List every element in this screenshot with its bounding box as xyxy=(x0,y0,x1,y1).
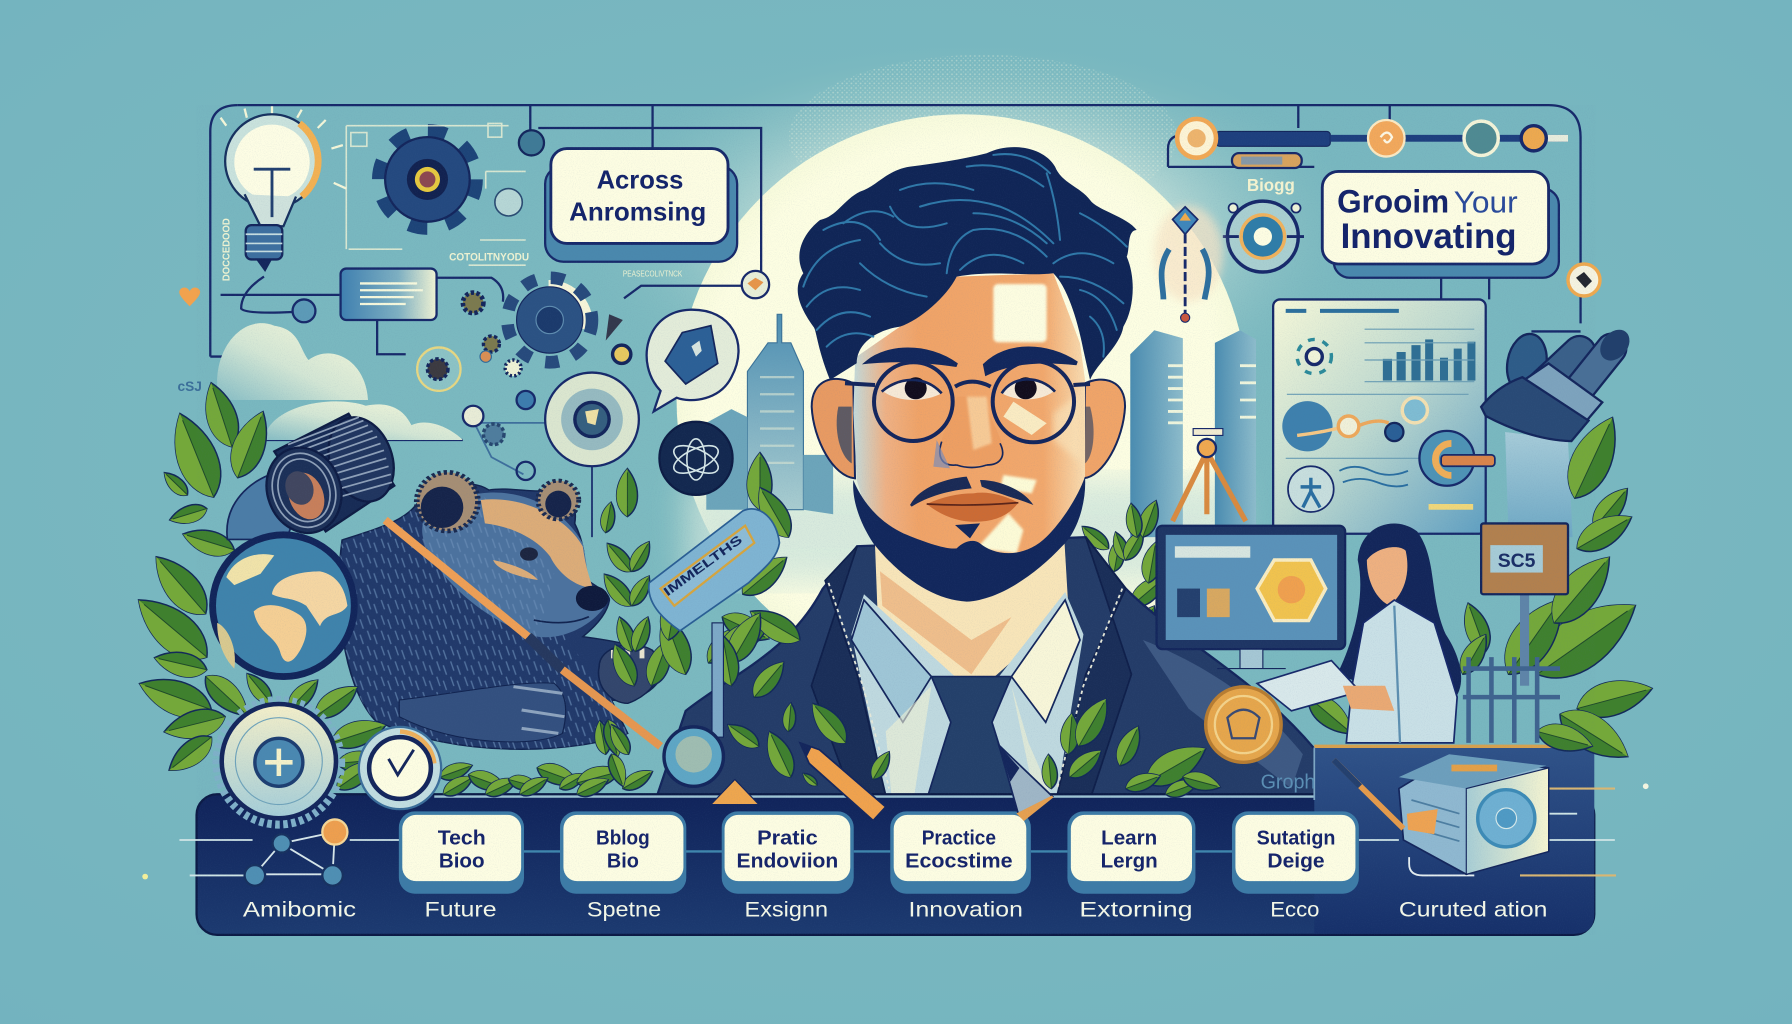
panel top rule xyxy=(434,796,1314,798)
dial xyxy=(1419,431,1495,486)
orange pencil xyxy=(800,743,886,821)
icon: node top xyxy=(519,130,544,155)
bear ears xyxy=(417,472,478,531)
bar chart xyxy=(1383,339,1475,381)
tripod xyxy=(1173,429,1246,521)
icon: spool xyxy=(255,408,405,544)
callout: Groom Your Innovating: Grooim xyxy=(1337,184,1449,220)
eyes xyxy=(882,377,1055,400)
sun glow behind portrait xyxy=(577,46,1366,686)
icon: light bulb xyxy=(221,106,346,272)
center plants xyxy=(597,453,806,703)
callout: Across Anromsing xyxy=(545,149,737,262)
buildings right xyxy=(1130,330,1256,549)
frame and circuit lines xyxy=(210,105,1581,440)
hair strands xyxy=(803,154,1127,357)
bear fur xyxy=(339,500,628,749)
face xyxy=(853,273,1085,600)
small heading Biogg: Biogg xyxy=(1247,175,1295,195)
bear eye and nose xyxy=(520,547,538,561)
left side doodles xyxy=(178,287,202,394)
step box: Sutatign Deige xyxy=(1232,811,1359,894)
icon: telescope xyxy=(1481,324,1636,537)
callout: Across Anromsing: Across xyxy=(597,165,683,195)
bear body xyxy=(339,484,664,749)
hood xyxy=(1481,377,1589,441)
glass orb xyxy=(664,727,723,786)
collar xyxy=(1520,363,1602,425)
bottom panel xyxy=(197,746,1594,935)
small text Groph: Groph xyxy=(1261,771,1315,794)
bottom labels: Curuted ation xyxy=(1399,897,1547,922)
portrait: body xyxy=(657,514,1326,795)
monitor xyxy=(1157,526,1345,669)
left plant cluster xyxy=(126,378,389,796)
step box: Learn Lergn xyxy=(1067,811,1195,894)
ears xyxy=(812,379,1125,478)
connector lines xyxy=(179,789,1616,875)
callout: Groom Your Innovating: Innovating xyxy=(1341,216,1517,256)
icon: heart xyxy=(179,287,200,306)
bottom labels: Future xyxy=(425,897,497,922)
africa xyxy=(254,605,306,662)
portrait: head xyxy=(798,147,1137,602)
gauge xyxy=(217,701,341,824)
glasses xyxy=(845,361,1090,442)
neck xyxy=(874,514,1069,697)
buildings left xyxy=(706,314,833,514)
clouds xyxy=(217,323,463,440)
triangle marker xyxy=(711,779,759,805)
gold badge xyxy=(1206,687,1281,762)
face highlights xyxy=(977,284,1082,553)
schematic lines near gear xyxy=(346,123,526,265)
cube xyxy=(1399,754,1549,874)
woman xyxy=(1257,524,1461,743)
step box: Tech Bioo xyxy=(399,811,524,894)
clock xyxy=(359,727,441,809)
rear blob xyxy=(1503,331,1551,396)
bottom labels: Extorning xyxy=(1079,897,1193,922)
barrels xyxy=(1543,352,1579,386)
step box: Learn Lergn: Learn xyxy=(1101,827,1157,850)
face xyxy=(1367,547,1407,606)
note box xyxy=(341,269,437,320)
ornament xyxy=(1154,206,1223,322)
step box: Practice Ecocstime xyxy=(890,811,1031,894)
decorative dots xyxy=(1643,783,1649,789)
icon: large gear xyxy=(379,131,475,227)
step box: Tech Bioo: Bioo xyxy=(439,849,485,872)
callout: Groom Your Innovating xyxy=(1322,171,1559,278)
step box: Practice Ecocstime: Practice xyxy=(922,827,996,850)
eurasia xyxy=(272,571,347,626)
runner xyxy=(1288,466,1334,512)
network icon xyxy=(245,819,347,886)
pie xyxy=(1282,398,1427,451)
lower-center sprig xyxy=(605,693,1223,801)
faint caption: PEASECOLIVTNCK xyxy=(623,270,683,279)
step box: Tech Bioo: Tech xyxy=(438,827,486,850)
bear head fur xyxy=(422,493,554,637)
small label csh: cSJ xyxy=(178,379,202,394)
bottom labels xyxy=(243,897,1547,922)
vertical caption: DOCCEDOOD xyxy=(222,218,233,281)
bottom labels: Innovation xyxy=(909,897,1023,922)
telescope base xyxy=(1505,432,1573,537)
step box: Bblog Bio: Bio xyxy=(607,849,639,872)
beard xyxy=(853,477,1085,602)
bear foreleg xyxy=(399,683,566,742)
shirt xyxy=(851,592,1083,795)
jacket xyxy=(657,537,1326,795)
bottom labels: Ecco xyxy=(1270,897,1319,922)
step box: Sutatign Deige: Deige xyxy=(1267,849,1325,872)
necktie xyxy=(928,677,1015,795)
node icon xyxy=(742,271,769,298)
step box: Learn Lergn: Lergn xyxy=(1101,849,1158,872)
mouth xyxy=(910,477,1033,522)
bear claws xyxy=(513,687,564,733)
left marker dot xyxy=(142,874,148,879)
pen and tag xyxy=(1334,760,1438,834)
bottom labels: Exsignn xyxy=(745,897,828,922)
garland of leaves xyxy=(437,718,656,801)
callout: Across Anromsing: Anromsing xyxy=(569,197,706,227)
hair xyxy=(798,147,1137,380)
center sign xyxy=(649,509,779,737)
bear xyxy=(339,472,664,749)
step box: Bblog Bio: Bblog xyxy=(596,827,650,850)
blue leaf behind spool xyxy=(227,473,293,539)
right-of-face plants xyxy=(1068,498,1201,688)
icon: globe xyxy=(209,531,358,680)
step box: Sutatign Deige: Sutatign xyxy=(1257,827,1335,850)
step box: Pratic Endoviion: Pratic xyxy=(757,827,818,850)
fence xyxy=(1463,657,1560,743)
right raised section xyxy=(1314,746,1594,934)
clipboard xyxy=(1257,661,1360,711)
bear pencil xyxy=(385,520,661,746)
bottom labels: Amibomic xyxy=(243,897,356,922)
step box: Practice Ecocstime: Ecocstime xyxy=(905,849,1013,872)
step box: Pratic Endoviion xyxy=(722,811,854,894)
bottom labels: Spetne xyxy=(587,897,661,922)
top timeline xyxy=(1177,119,1568,168)
icon: sun glyph xyxy=(1297,339,1331,374)
hair xyxy=(1337,524,1461,709)
icon: eye device xyxy=(1223,201,1304,272)
bear paw xyxy=(599,645,659,703)
wooden sign xyxy=(1481,523,1568,686)
speech bubble xyxy=(647,310,739,411)
nose xyxy=(933,397,1003,468)
wooden sign: SC5 xyxy=(1498,550,1536,572)
bear tan fur xyxy=(481,499,593,588)
arm xyxy=(1343,686,1394,711)
globe bubble xyxy=(545,373,639,537)
callout: Groom Your Innovating: Your xyxy=(1454,185,1518,220)
gears cluster xyxy=(417,278,631,480)
step box: Pratic Endoviion: Endoviion xyxy=(737,849,838,872)
icon: side badge xyxy=(1568,264,1600,296)
center sign: IMMELTHS xyxy=(661,533,745,599)
data panel xyxy=(1273,299,1495,534)
silver pen xyxy=(999,745,1053,819)
eyebrows xyxy=(868,349,1077,373)
circle node xyxy=(293,299,315,322)
bear head xyxy=(422,493,605,637)
caption text: COTOLITNYODU xyxy=(449,252,529,264)
atom ball xyxy=(659,422,733,495)
step box: Bblog Bio xyxy=(560,811,686,894)
shirt xyxy=(1346,600,1457,743)
jacket lapels xyxy=(811,537,1131,795)
far right plants xyxy=(1301,409,1656,771)
